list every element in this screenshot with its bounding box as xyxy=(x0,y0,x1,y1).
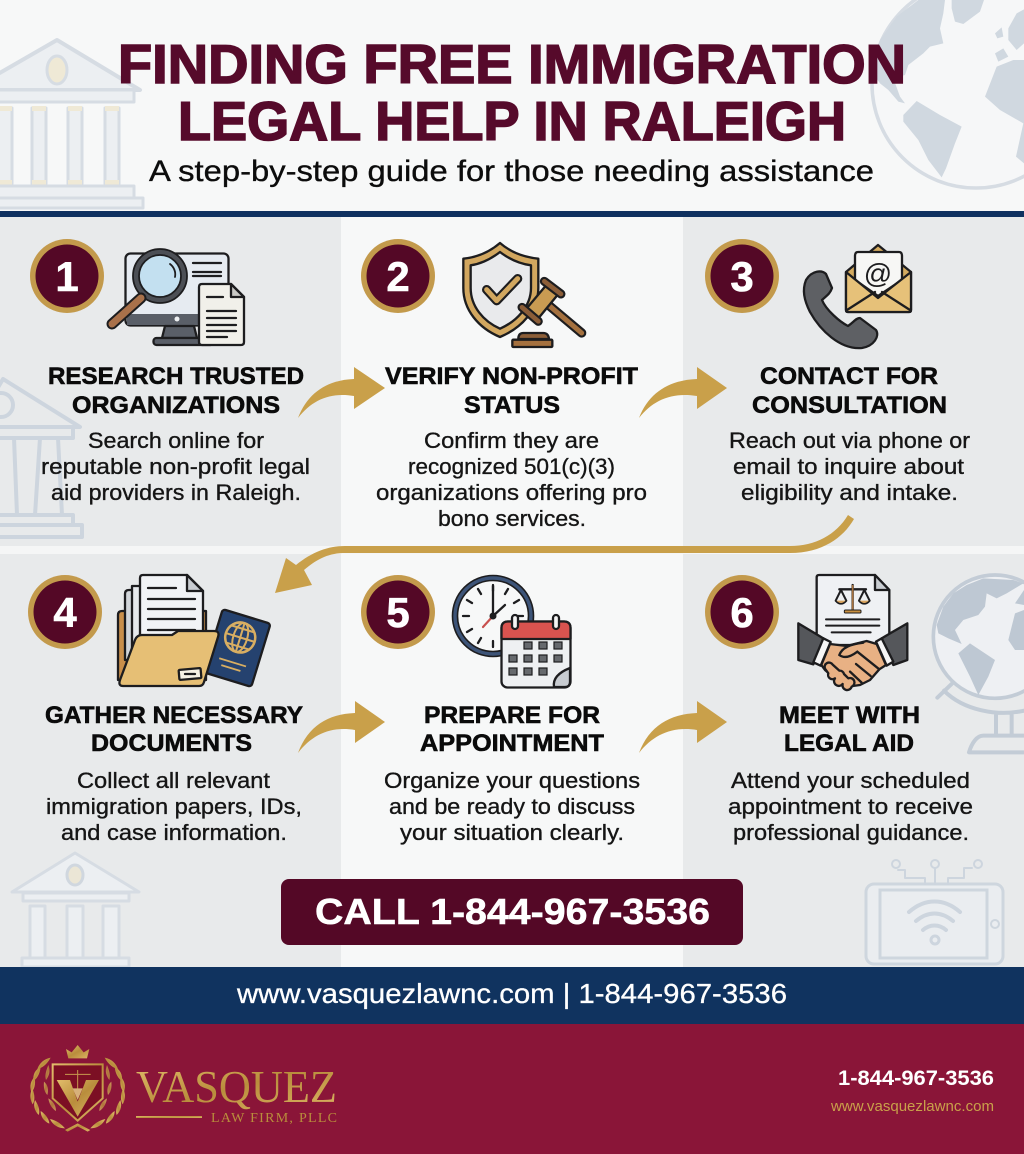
maroon footer xyxy=(0,1024,1024,1154)
icon: computer with magnifier and document xyxy=(112,249,244,345)
title: FINDING FREE IMMIGRATION xyxy=(118,33,906,95)
heading step 3 xyxy=(752,363,947,419)
description step 6 xyxy=(728,768,973,845)
description step 4 xyxy=(46,768,302,845)
watermark: courthouse bottom left xyxy=(12,853,139,967)
heading step 1: ORGANIZATIONS xyxy=(72,392,280,419)
heading step 4: GATHER NECESSARY xyxy=(45,702,303,729)
navy contact band: www.vasquezlawnc.com | 1-844-967-3536 xyxy=(236,978,787,1009)
footer phone number: 1-844-967-3536 xyxy=(838,1067,994,1090)
title xyxy=(118,33,906,152)
panel: step 1 xyxy=(30,239,310,505)
description step 1: Search online for xyxy=(88,428,264,453)
number badge 6 xyxy=(705,575,779,649)
watermark: tablet with wifi xyxy=(866,860,1003,964)
logo: Vasquez Law Firm crest xyxy=(30,1045,337,1132)
description step 2: recognized 501(c)(3) xyxy=(408,454,615,479)
heading step 2 xyxy=(385,363,638,419)
heading step 1 xyxy=(48,363,304,419)
heading step 6: MEET WITH xyxy=(779,702,920,729)
watermark: globe middle right xyxy=(933,575,1024,752)
watermark: courthouse top left xyxy=(0,40,143,208)
number badge 4: 4 xyxy=(53,589,77,636)
number badge 2: 2 xyxy=(386,253,410,300)
arrow: step 4 to 5 xyxy=(298,701,385,753)
column background right xyxy=(683,217,1024,967)
heading step 4 xyxy=(45,702,303,757)
heading step 6 xyxy=(779,702,920,757)
icon: shield with gavel xyxy=(463,243,582,347)
description step 2: bono services. xyxy=(438,506,586,531)
heading step 4: DOCUMENTS xyxy=(91,730,252,757)
panel: step 2 xyxy=(361,239,647,531)
description step 6: Attend your scheduled xyxy=(731,768,970,793)
arrow: step 3 down to 4 xyxy=(275,515,854,593)
panel: step 5 xyxy=(361,575,640,845)
watermark: globe top right xyxy=(872,0,1024,188)
description step 4: immigration papers, IDs, xyxy=(46,794,302,819)
arrow: step 1 to 2 xyxy=(298,367,385,418)
watermark: courthouse middle left xyxy=(0,379,82,537)
icon: contract and handshake xyxy=(798,575,907,690)
number badge 2 xyxy=(361,239,435,313)
description step 4: Collect all relevant xyxy=(77,768,270,793)
description step 1: reputable non-profit legal xyxy=(41,454,310,479)
description step 5 xyxy=(384,768,640,845)
heading step 5 xyxy=(420,702,604,757)
arrow: step 2 to 3 xyxy=(639,367,727,418)
heading step 5: APPOINTMENT xyxy=(420,730,604,757)
heading step 3: CONSULTATION xyxy=(752,392,947,419)
description step 5: your situation clearly. xyxy=(400,820,624,845)
description step 5: Organize your questions xyxy=(384,768,640,793)
heading step 2: STATUS xyxy=(464,392,560,419)
number badge 3: 3 xyxy=(730,253,754,300)
description step 2: organizations offering pro xyxy=(376,480,647,505)
number badge 1 xyxy=(30,239,104,313)
number badge 1: 1 xyxy=(55,253,79,300)
description step 4: and case information. xyxy=(61,820,287,845)
number badge 5 xyxy=(361,575,435,649)
heading step 5: PREPARE FOR xyxy=(424,702,600,729)
heading step 2: VERIFY NON-PROFIT xyxy=(385,363,638,390)
arrow: step 5 to 6 xyxy=(639,701,727,753)
description step 2: Confirm they are xyxy=(424,428,599,453)
heading step 1: RESEARCH TRUSTED xyxy=(48,363,304,390)
description step 3: Reach out via phone or xyxy=(729,428,970,453)
icon: clock and calendar xyxy=(452,576,570,688)
title: LEGAL HELP IN RALEIGH xyxy=(178,90,846,152)
heading step 6: LEGAL AID xyxy=(784,730,914,757)
icon: phone and envelope: @ xyxy=(864,258,892,289)
number badge 5: 5 xyxy=(386,589,410,636)
column background left xyxy=(0,217,341,967)
panel: step 3 xyxy=(705,239,970,505)
logo: Vasquez Law Firm crest: VASQUEZ xyxy=(136,1062,337,1112)
logo: Vasquez Law Firm crest: LAW FIRM, PLLC xyxy=(211,1111,337,1126)
panel: step 4 xyxy=(28,575,303,845)
description step 6: professional guidance. xyxy=(733,820,969,845)
number badge 6: 6 xyxy=(730,589,754,636)
call to action button xyxy=(281,879,743,945)
row separator strip xyxy=(0,546,1024,554)
description step 1: aid providers in Raleigh. xyxy=(51,480,301,505)
description step 1 xyxy=(41,428,310,505)
description step 5: and be ready to discuss xyxy=(389,794,635,819)
panel: step 6 xyxy=(705,575,973,845)
navy contact band xyxy=(0,967,1024,1024)
navy divider bar xyxy=(0,211,1024,217)
subtitle: A step-by-step guide for those needing assistance xyxy=(149,155,874,188)
number badge 3 xyxy=(705,239,779,313)
description step 2 xyxy=(376,428,647,531)
call to action button: CALL 1-844-967-3536 xyxy=(315,891,710,932)
description step 3 xyxy=(729,428,970,505)
icon: phone and envelope xyxy=(804,245,911,348)
description step 3: eligibility and intake. xyxy=(741,480,958,505)
description step 3: email to inquire about xyxy=(733,454,964,479)
heading step 3: CONTACT FOR xyxy=(760,363,938,390)
footer website: www.vasquezlawnc.com xyxy=(830,1099,994,1115)
description step 6: appointment to receive xyxy=(728,794,973,819)
icon: folder with papers and passport xyxy=(118,575,271,687)
number badge 4 xyxy=(28,575,102,649)
